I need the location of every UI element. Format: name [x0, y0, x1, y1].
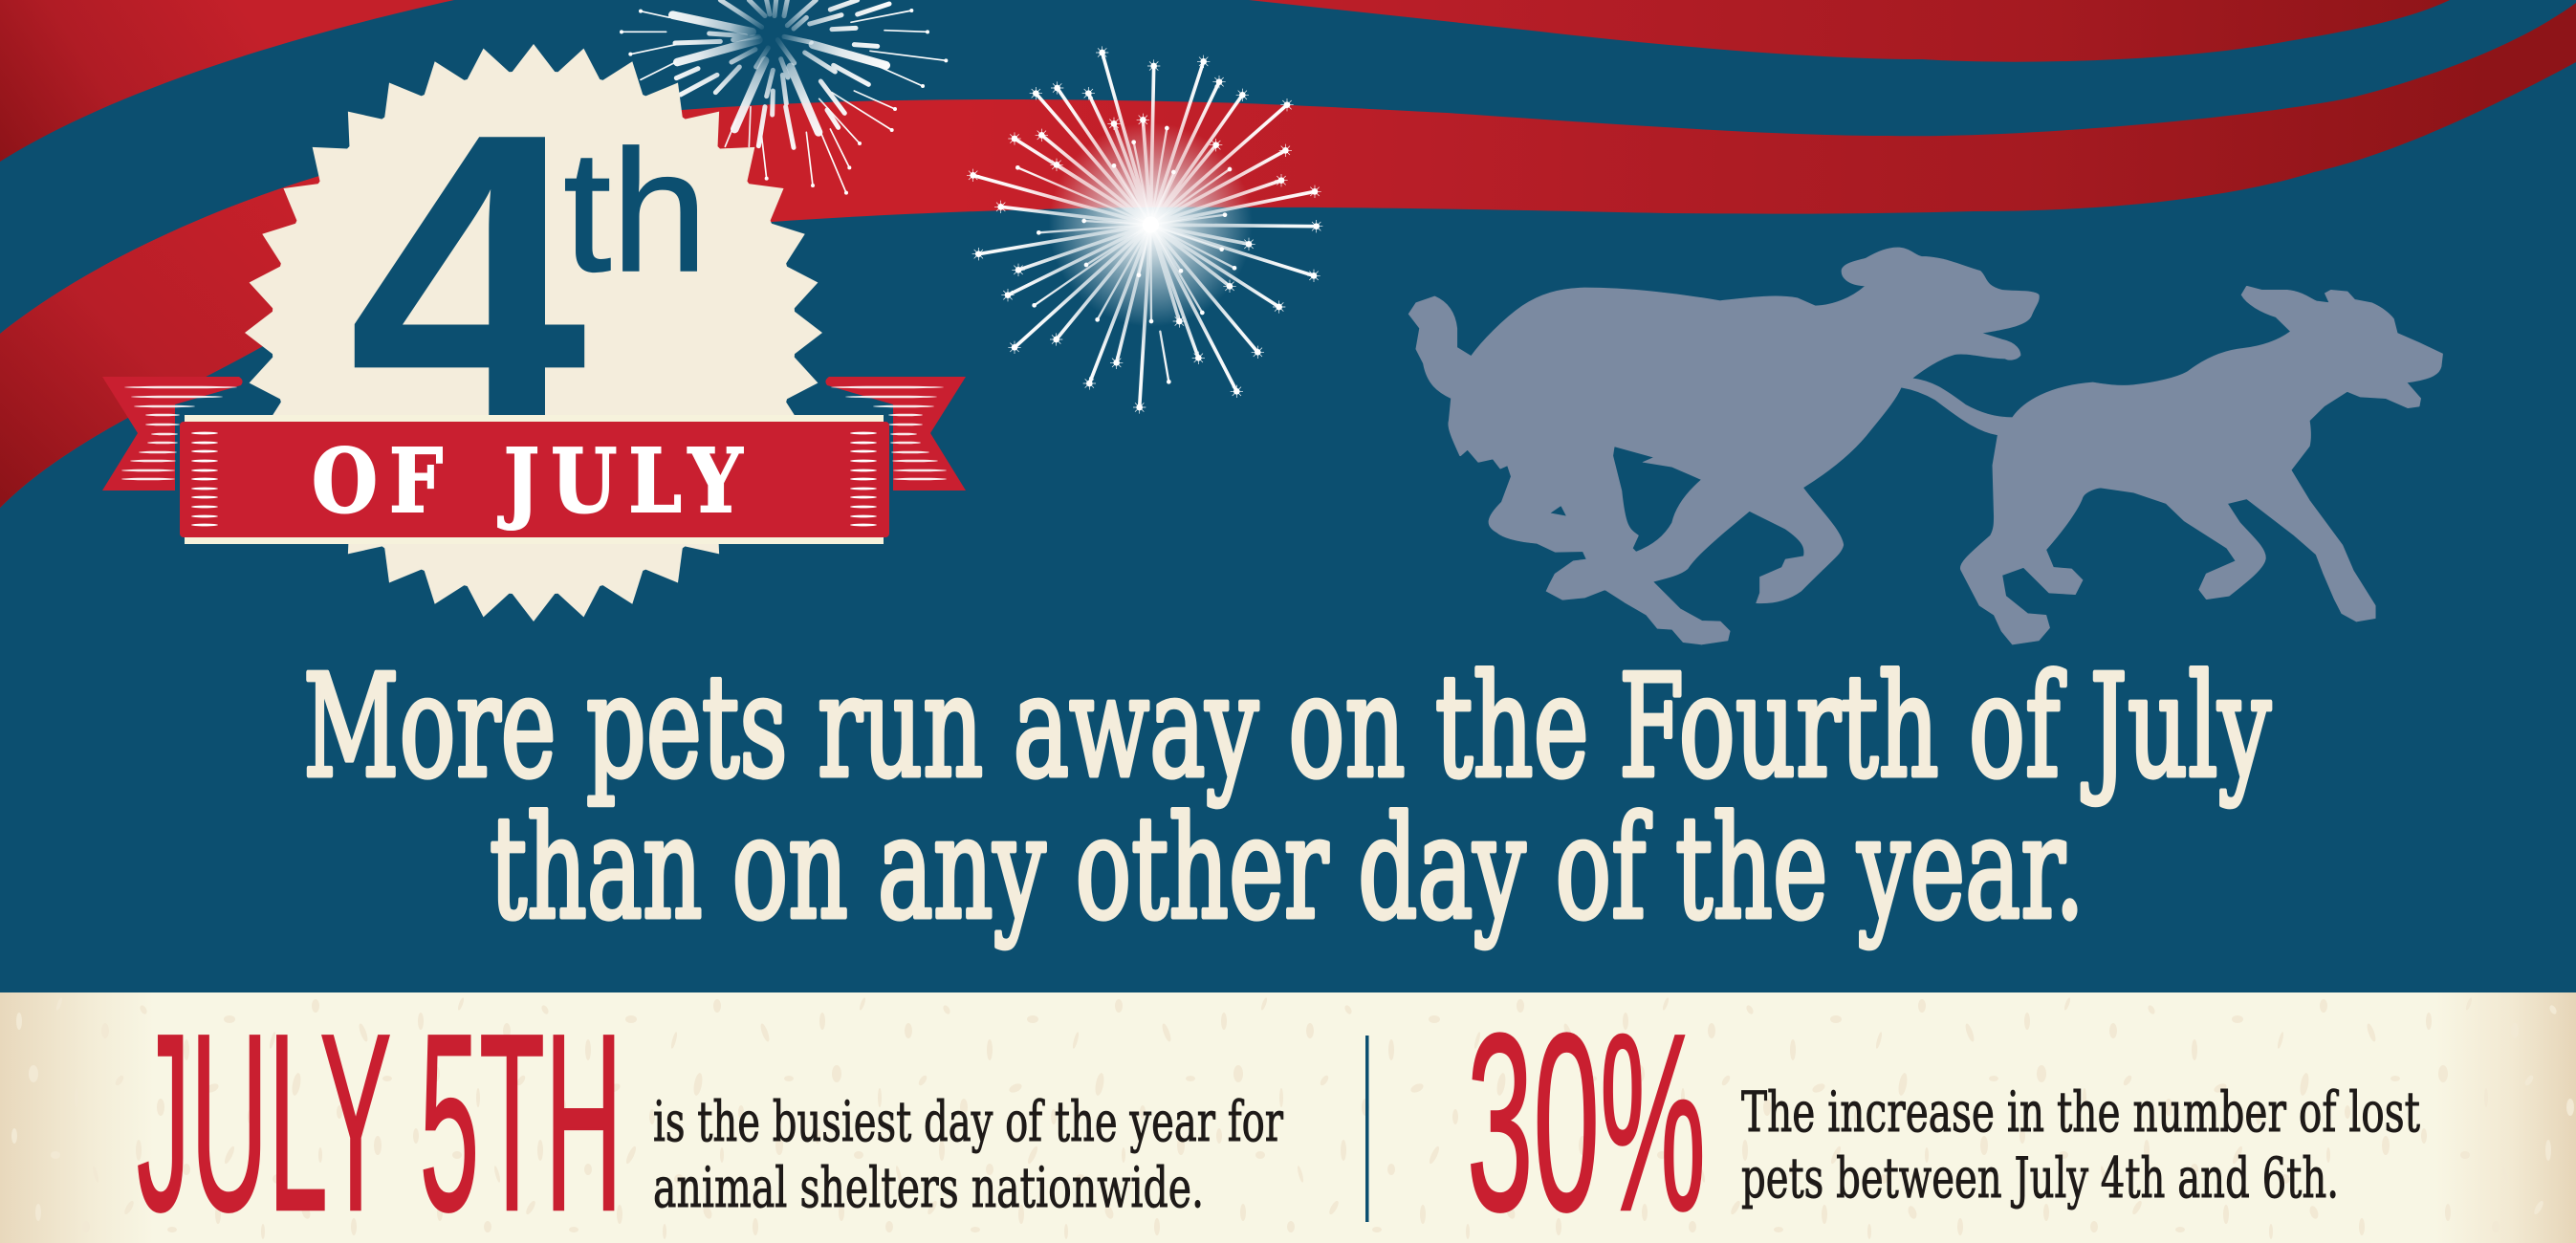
- firework: main burst: [967, 46, 1322, 414]
- dog: left: [1409, 248, 2039, 644]
- dog: right: [1901, 286, 2442, 644]
- panel: statistics strip: [0, 981, 2576, 1243]
- dogs: running silhouettes: [1409, 248, 2442, 644]
- stat description: [1741, 1079, 2420, 1210]
- banner: red band: [180, 415, 889, 544]
- ordinal: th: th: [563, 115, 708, 308]
- stat description: is the busiest day of the year for: [653, 1089, 1283, 1154]
- background: navy panel: [0, 0, 2576, 992]
- firework: top burst: [620, 0, 948, 195]
- numeral: 4: 4: [348, 47, 589, 516]
- stat description: animal shelters nationwide.: [653, 1155, 1204, 1220]
- ribbons: red waving stripes: [0, 0, 2576, 508]
- ribbon tails: [102, 377, 966, 491]
- stat description: [653, 1089, 1283, 1220]
- badge: 4th of July seal: [102, 44, 966, 622]
- right tail: [825, 377, 966, 491]
- stat: 30%: [1467, 981, 2420, 1243]
- headline: [303, 644, 2271, 950]
- seal: cream starburst: [245, 44, 822, 622]
- banner text: OF JULY: [312, 429, 753, 534]
- left tail: [102, 377, 243, 491]
